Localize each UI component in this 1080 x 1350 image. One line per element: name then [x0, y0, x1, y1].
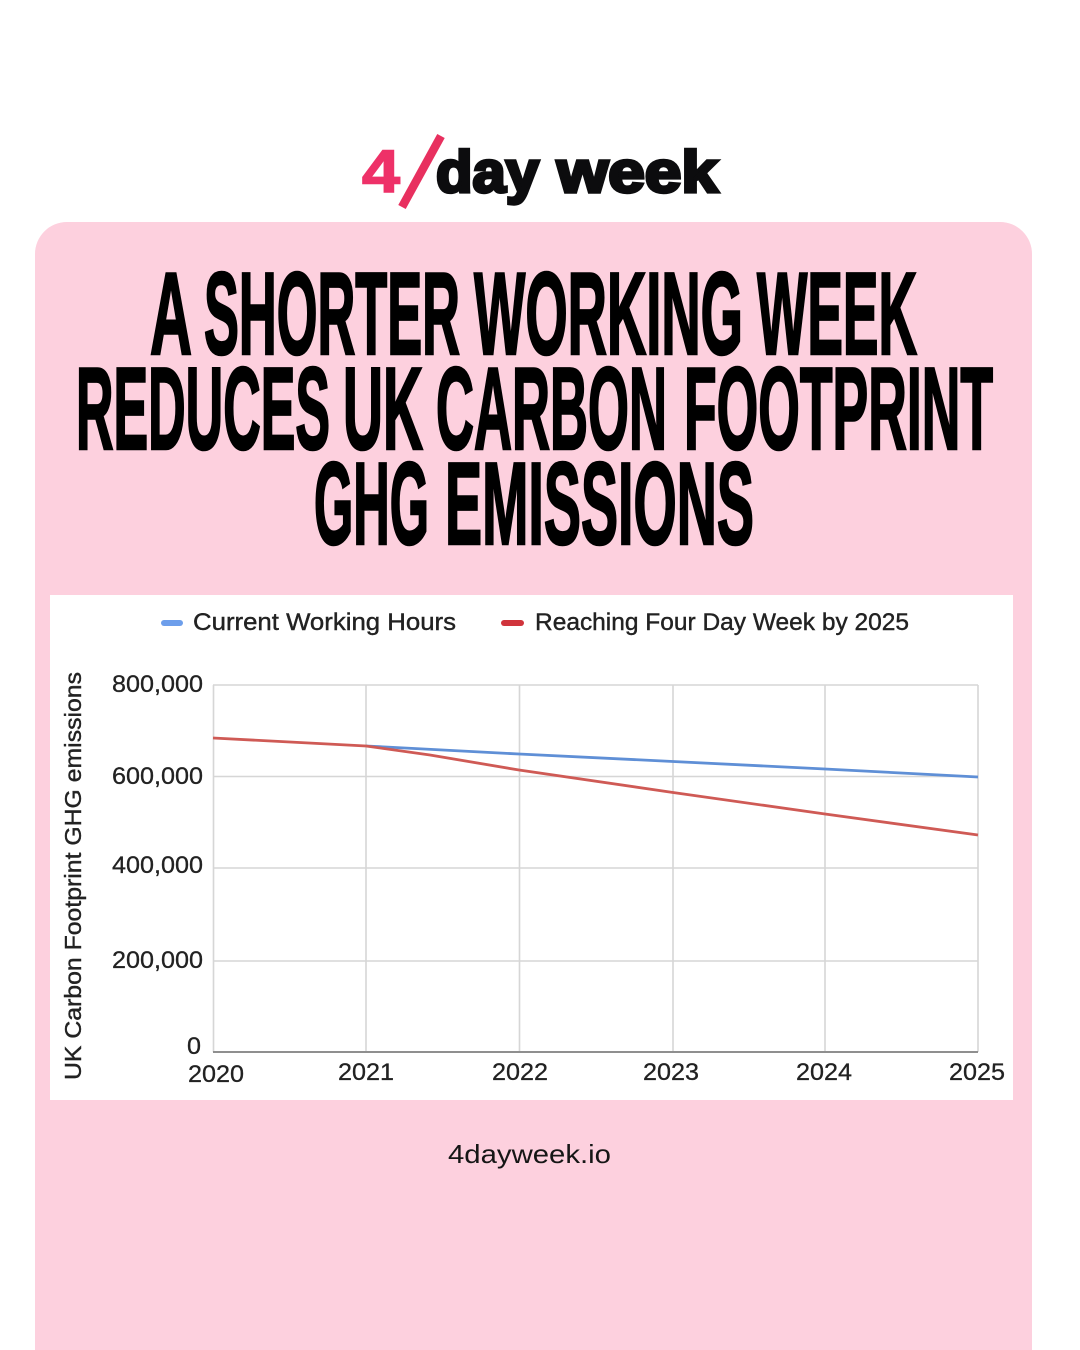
y axis labels: 400,000 [112, 852, 203, 879]
x axis labels: 2023 [643, 1059, 699, 1086]
legend: current working hours: Current Working Hours [193, 609, 456, 636]
y axis title: UK Carbon Footprint GHG emissions [60, 672, 86, 1080]
title line 1: WORKING [474, 248, 743, 379]
logo wordmark: day [436, 140, 539, 205]
legend: reaching four day week: Reaching Four Day Week by 2025 [535, 609, 909, 636]
title line 3 [314, 438, 754, 569]
title: EMISSIONS [445, 438, 754, 569]
line: current working hours [366, 746, 978, 777]
logo wordmark: week [556, 140, 719, 205]
logo slash [402, 136, 441, 207]
logo wordmark [436, 140, 719, 205]
panel: line chart [50, 595, 1013, 1100]
x axis labels [188, 1059, 1005, 1088]
footer url: 4dayweek.io [448, 1139, 611, 1169]
title line 2 [76, 343, 993, 474]
chart background [50, 595, 1013, 1100]
x axis labels: 2021 [338, 1059, 394, 1086]
y axis labels [112, 671, 203, 1060]
y axis labels: 800,000 [112, 671, 203, 698]
title line 2: REDUCES [76, 343, 330, 474]
panel: pink background [35, 222, 1032, 1350]
line: reaching four day week [213, 738, 978, 835]
title line 1: SHORTER [204, 248, 460, 379]
y axis labels: 600,000 [112, 763, 203, 790]
x axis labels: 2022 [492, 1059, 548, 1086]
title line 2: CARBON [436, 343, 667, 474]
title line 1: A [150, 248, 192, 379]
y axis labels: 200,000 [112, 947, 203, 974]
title [76, 248, 993, 569]
logo numeral 4: 4 [362, 138, 401, 205]
x axis labels: 2020 [188, 1061, 244, 1088]
legend [164, 609, 909, 636]
title line 2: UK [343, 343, 423, 474]
x axis labels: 2025 [949, 1059, 1005, 1086]
x axis labels: 2024 [796, 1059, 852, 1086]
title line 3: GHG [314, 438, 429, 569]
logo: 4 day week [362, 136, 719, 207]
y axis labels: 0 [187, 1033, 201, 1060]
